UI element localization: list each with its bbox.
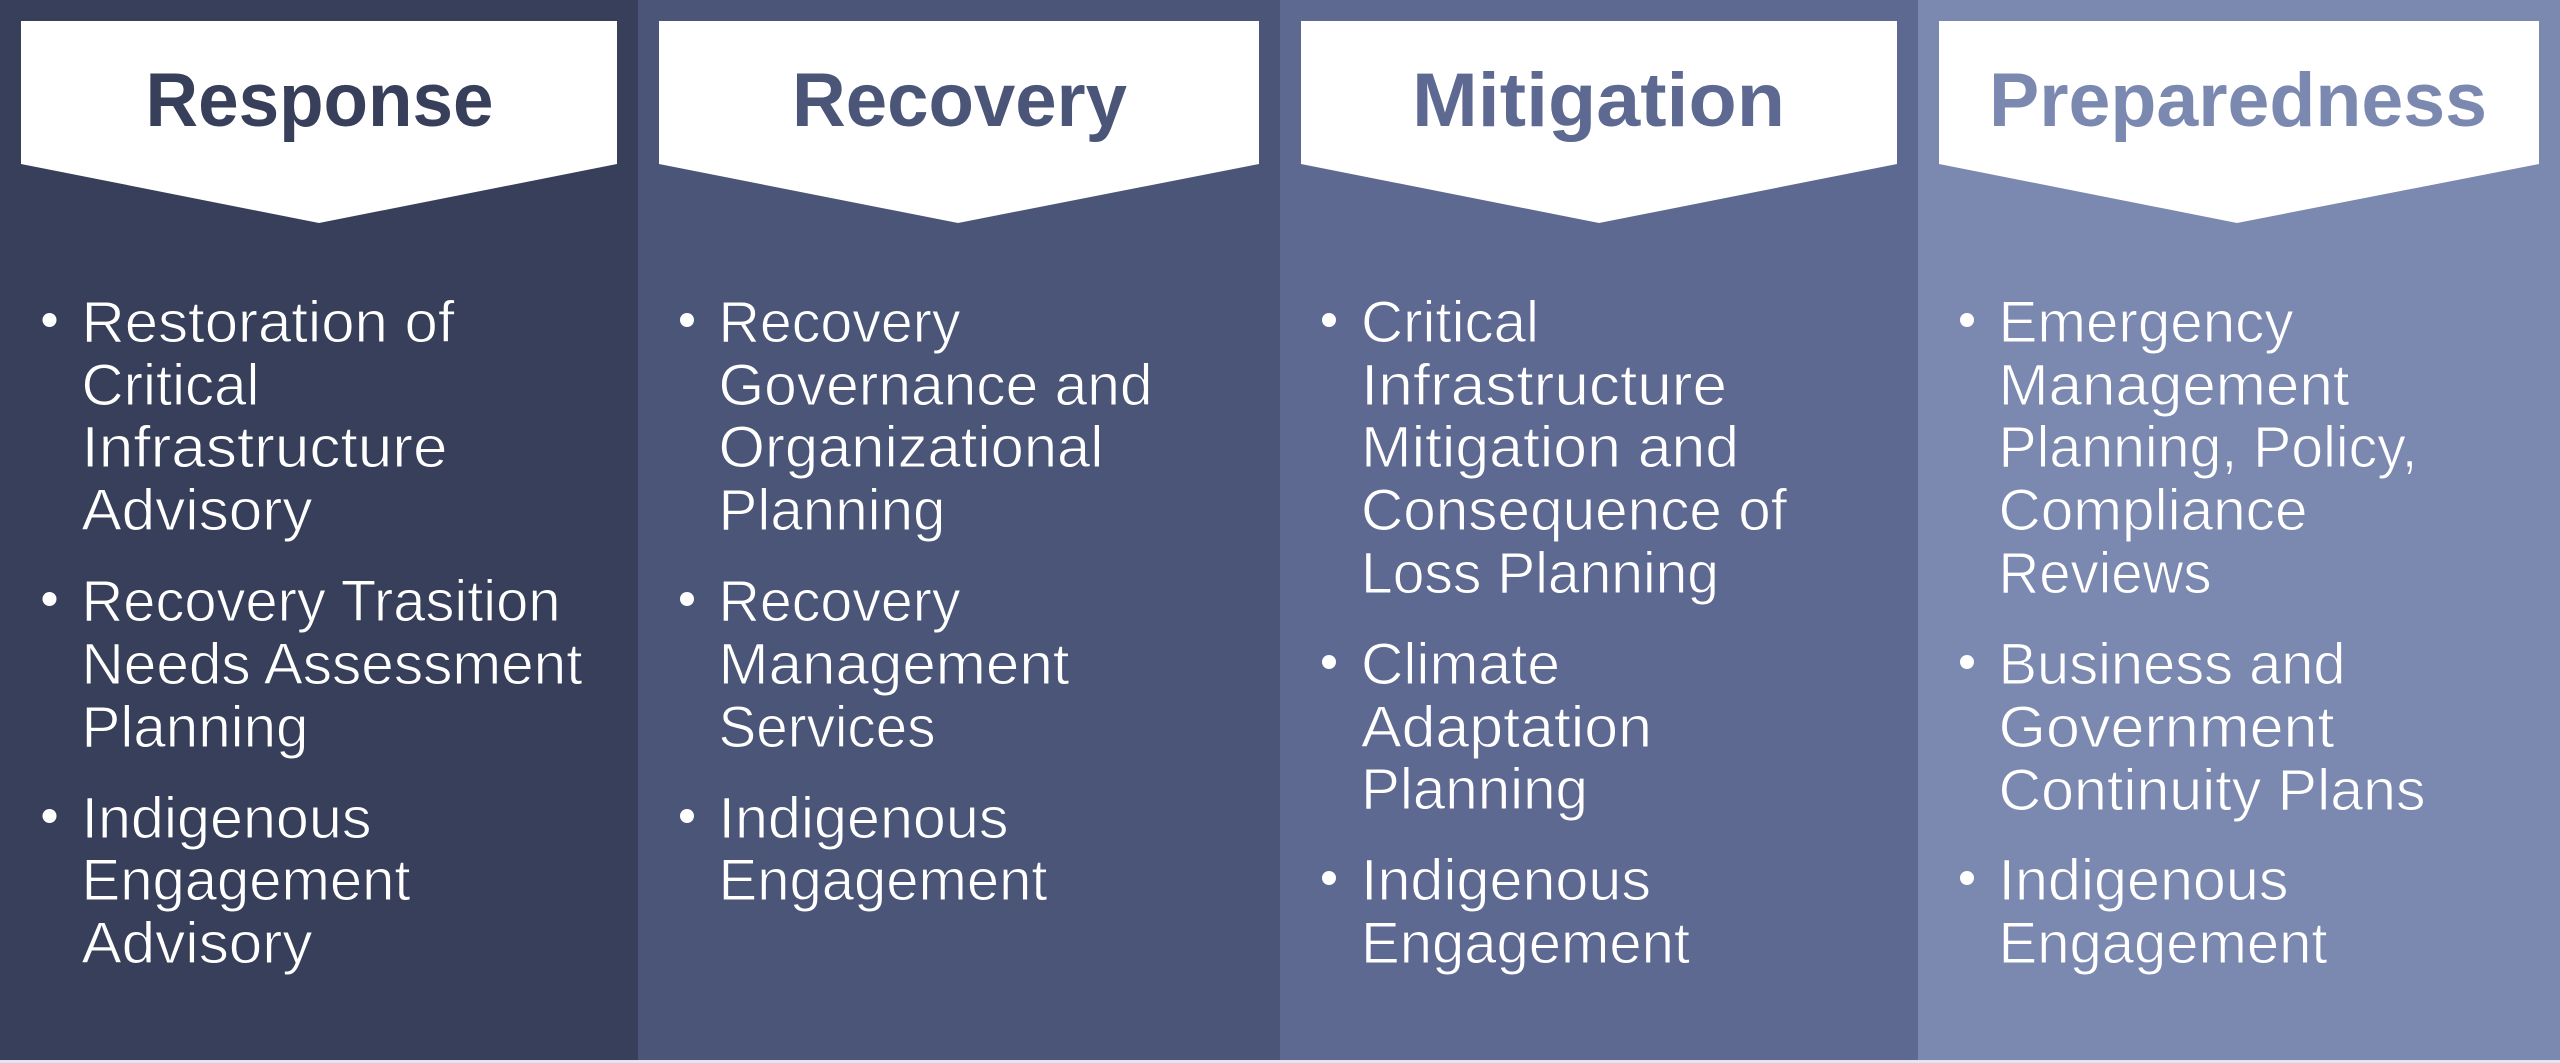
heading: Response: Response [146,58,494,143]
bullet item: critical infrastructure: Loss Planning [1361,541,1719,606]
bullet item: continuity plans [1960,632,2426,823]
bullet item: management services [680,569,1070,760]
bullet item: restoration [42,290,455,543]
bullet item: indigenous engagement advisory: Advisory [82,911,312,976]
panel: recovery [638,0,1280,1060]
heading banner [659,21,1259,223]
heading banner [1939,21,2539,223]
panel: response [0,0,638,1060]
panel: mitigation [1280,0,1918,1060]
bullet item: climate adaptation: Planning [1361,757,1588,822]
bullet item: continuity plans: Government [1998,695,2334,760]
bullet item: critical infrastructure [1322,290,1788,606]
heading: Preparedness: Preparedness [1989,58,2487,143]
bullet item: critical infrastructure: Mitigation and [1361,415,1739,480]
heading: Recovery: Recovery [792,58,1127,143]
bullet item: management services: Management [718,632,1070,697]
bullet item: continuity plans: Continuity Plans [1998,758,2426,823]
bullet item: recovery transition: Needs Assessment [82,632,582,697]
bullet item: recovery transition: Recovery Trasition [82,569,560,634]
bullet item: governance: Recovery [718,290,960,355]
bullet item: governance: Planning [718,478,946,543]
bullet item: climate adaptation: Climate [1361,632,1560,697]
bullet item: critical infrastructure: Critical [1361,290,1539,355]
bullet item: recovery transition: Planning [82,695,308,760]
bullet item: critical infrastructure: Consequence of [1361,478,1788,543]
bullet item: restoration: Restoration of [82,290,455,355]
bullet item: governance: Governance and [718,353,1152,418]
bullet item: climate adaptation [1322,632,1652,822]
heading banner [1301,21,1897,223]
bullet item: indigenous engagement: Indigenous [1998,848,2288,913]
bullet item: emergency management planning: Emergency [1998,290,2294,355]
bullet item: continuity plans: Business and [1998,632,2346,697]
bullet item: indigenous engagement advisory: Engagement [82,848,410,913]
panel background [1918,0,2560,1060]
bullet item: emergency management planning: Reviews [1998,541,2212,606]
bullet item: indigenous engagement [680,786,1048,913]
bullet item: governance: Organizational [718,415,1104,480]
heading: Mitigation: Mitigation [1412,58,1785,143]
bullet item: emergency management planning [1960,290,2418,606]
bullet item: emergency management planning: Planning, Policy, [1998,415,2418,480]
bullet item: restoration: Infrastructure [82,415,448,480]
panel background [638,0,1280,1060]
bullet item: indigenous engagement: Engagement [1998,911,2328,976]
bullet item: indigenous engagement advisory: Indigenous [82,786,372,851]
bullet item: indigenous engagement: Engagement [718,848,1048,913]
bullet item: restoration: Advisory [82,478,312,543]
panel: preparedness [1918,0,2560,1060]
bullet item: indigenous engagement [1960,848,2328,976]
bullet item: indigenous engagement [1322,848,1690,976]
bullet item: governance [680,290,1152,543]
bullet item: management services: Recovery [718,569,960,634]
bullet item: climate adaptation: Adaptation [1361,695,1652,760]
bullet item: indigenous engagement advisory [42,786,410,976]
heading banner [21,21,617,223]
panel background [0,0,638,1060]
bullet item: indigenous engagement: Engagement [1361,911,1690,976]
bullet item: emergency management planning: Compliance [1998,478,2308,543]
bullet item: indigenous engagement: Indigenous [1361,848,1651,913]
bullet item: recovery transition [42,569,582,760]
bullet item: emergency management planning: Management [1998,353,2350,418]
panel background [1280,0,1918,1060]
bullet item: indigenous engagement: Indigenous [718,786,1008,851]
bullet item: restoration: Critical [82,353,260,418]
bullet item: critical infrastructure: Infrastructure [1361,353,1727,418]
bullet item: management services: Services [718,695,936,760]
